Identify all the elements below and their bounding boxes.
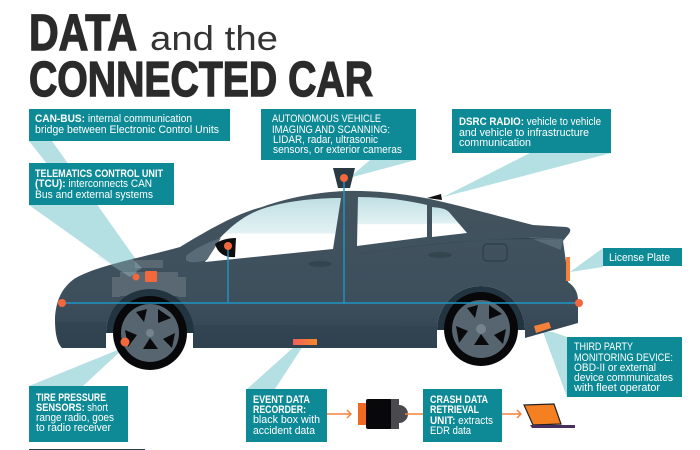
callout: third party monitoring: MONITORING DEVICE:: [574, 352, 673, 364]
callout: license plate: [603, 248, 682, 266]
dsrc antenna: [427, 194, 442, 200]
callout: autonomous vehicle: IMAGING AND SCANNING:: [272, 124, 390, 136]
callout: license plate: License Plate: [609, 252, 670, 264]
callout: third party monitoring: THIRD PARTY: [574, 341, 634, 353]
body shading: [55, 322, 437, 348]
callout beams: [29, 141, 611, 397]
arrow: recorder to black box: [327, 410, 351, 418]
callout: event data recorder: [246, 389, 327, 442]
callout: crash data retrieval: UNIT: extracts: [430, 415, 493, 427]
callout: TCU: (TCU): interconnects CAN: [35, 178, 152, 190]
car body: [55, 191, 578, 348]
arrow: black box to retrieval unit: [405, 413, 423, 415]
title: [29, 4, 373, 107]
callout: third party monitoring: with fleet operator: [573, 382, 660, 394]
title: CONNECTED CAR: [29, 53, 373, 107]
callout: event data recorder: EVENT DATA: [253, 394, 310, 406]
title: and the: [150, 20, 278, 58]
callout: DSRC radio: communication: [459, 137, 531, 149]
callout: third party monitoring: device communicates: [574, 372, 673, 384]
icon: laptop: [524, 404, 575, 428]
callout: event data recorder: accident data: [253, 425, 316, 437]
arrow: retrieval to laptop: [502, 410, 521, 418]
side windows: [205, 198, 341, 262]
callout: crash data retrieval: RETRIEVAL: [430, 404, 479, 416]
callout: crash data retrieval: [423, 389, 502, 442]
wiring lines: [62, 178, 579, 303]
callout: autonomous vehicle: AUTONOMOUS VEHICLE: [272, 113, 381, 125]
callout: event data recorder: black box with: [253, 414, 320, 426]
callout: crash data retrieval: EDR data: [430, 425, 472, 437]
front wheel: [106, 289, 194, 370]
callout: CAN-BUS: CAN-BUS: internal communication: [35, 113, 192, 125]
fuel door: [483, 244, 507, 261]
roof camera: [333, 168, 355, 188]
callout: DSRC radio: DSRC RADIO: vehicle to vehicle: [459, 116, 601, 128]
callout: crash data retrieval: CRASH DATA: [430, 394, 488, 406]
callout: autonomous vehicle: [261, 109, 416, 160]
callout: TCU: TELEMATICS CONTROL UNIT: [35, 168, 163, 180]
callout: tire pressure: SENSORS: short: [36, 402, 108, 414]
beam highlights on hood: [97, 247, 142, 277]
callout: autonomous vehicle: sensors, or exterior cameras: [273, 144, 402, 156]
side mirror: [215, 238, 236, 257]
engine bay: [112, 260, 186, 297]
callout: DSRC radio: and vehicle to infrastructure: [459, 127, 589, 139]
door handles: [308, 252, 452, 267]
callout: event data recorder: RECORDER:: [253, 404, 306, 416]
callout: CAN-BUS: [29, 109, 230, 141]
callout: TCU: Bus and external systems: [35, 189, 153, 201]
callout: tire pressure: to radio receiver: [36, 422, 111, 434]
icon: black box: [358, 399, 408, 429]
car: [55, 168, 578, 348]
callout: tire pressure: [29, 386, 128, 442]
callout: CAN-BUS: bridge between Electronic Control Units: [35, 124, 219, 136]
callout: autonomous vehicle: LIDAR, radar, ultrasonic: [273, 134, 378, 146]
rear wheel: [437, 286, 525, 366]
callout: DSRC radio: [452, 109, 611, 153]
callout: tire pressure: TIRE PRESSURE: [36, 392, 106, 404]
callout: tire pressure: range radio, goes: [36, 412, 114, 424]
orange sensors: [58, 174, 583, 346]
callout: third party monitoring: [567, 337, 682, 397]
callout: TCU: [29, 163, 174, 205]
title: DATA: [29, 4, 137, 61]
callout: third party monitoring: OBD-II or external: [574, 362, 656, 374]
footer strip: [29, 449, 145, 450]
